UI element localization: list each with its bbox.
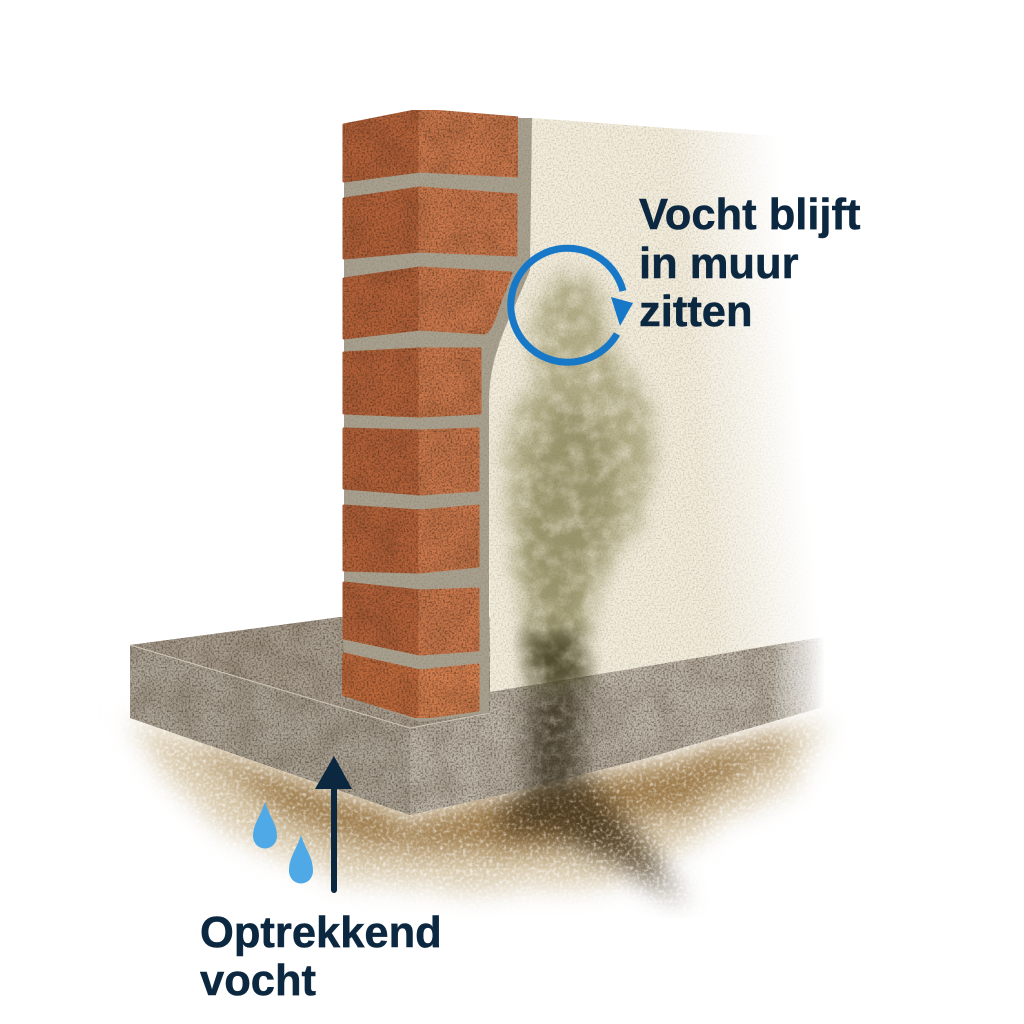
mortar column xyxy=(344,110,532,722)
slab right face xyxy=(410,636,830,815)
water drop left xyxy=(253,802,277,848)
brick row 6 xyxy=(344,506,478,572)
upward arrow: rising damp xyxy=(315,756,352,893)
brick row 7 xyxy=(344,583,478,654)
label: Vocht blijft in muur zitten: in muur xyxy=(639,240,799,288)
brick row 4 xyxy=(344,349,480,416)
infographic: rising damp in a brick wall xyxy=(122,110,860,996)
brick row 1 xyxy=(344,110,518,181)
moisture circulation arrow xyxy=(511,248,633,362)
brick row 3 xyxy=(344,268,511,338)
brick row 2 xyxy=(344,188,516,258)
label: Vocht blijft in muur zitten: zitten xyxy=(639,288,753,336)
soil: damp ground xyxy=(125,715,825,900)
brick pier xyxy=(342,110,518,718)
plaster wall xyxy=(488,118,830,692)
brick row 5 xyxy=(344,429,478,494)
mould stain on plaster xyxy=(506,268,653,692)
label: Optrekkend vocht: vocht xyxy=(200,957,316,1005)
damp stain on slab xyxy=(528,682,585,805)
label: Optrekkend vocht: Optrekkend xyxy=(200,909,442,957)
slab front edge highlight xyxy=(130,645,490,728)
water drop right xyxy=(289,835,313,884)
label: Vocht blijft in muur zitten: Vocht blijft xyxy=(639,191,860,239)
slab top surface xyxy=(130,617,500,728)
slab left face xyxy=(130,645,410,815)
brick row 8 xyxy=(342,654,478,718)
concrete slab xyxy=(130,617,830,815)
